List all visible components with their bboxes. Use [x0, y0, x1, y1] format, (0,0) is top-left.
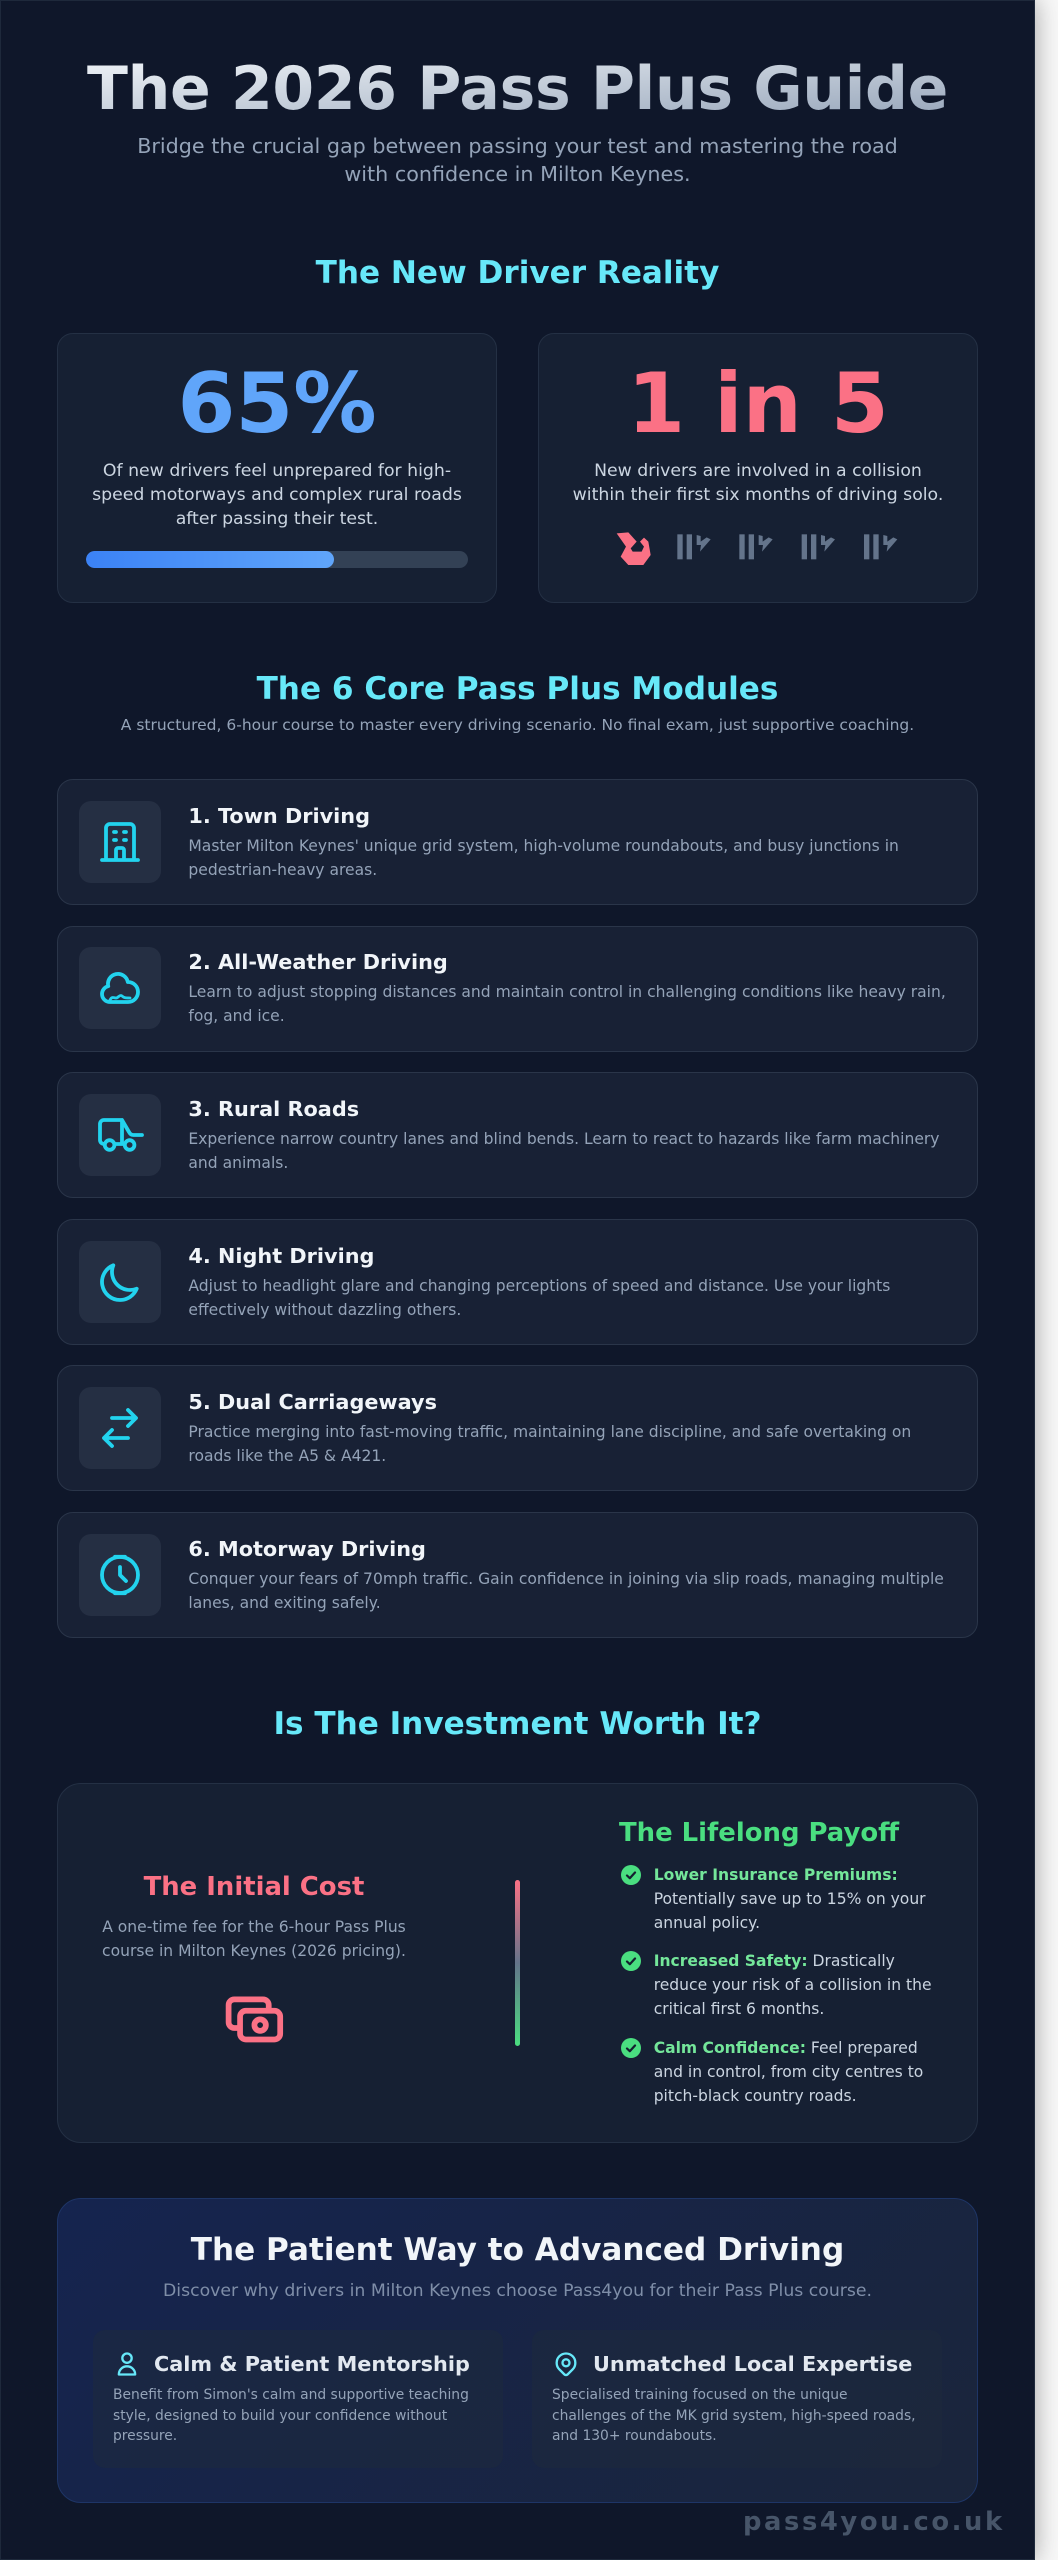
icon: location pin: [556, 2352, 576, 2376]
title: The 2026 Pass Plus Guide: [87, 54, 948, 124]
module title: 3. Rural Roads: [188, 1097, 359, 1121]
benefit text: [654, 2039, 923, 2105]
stat description: [573, 461, 943, 505]
progress bar: 65%: [86, 551, 468, 568]
cost description: [102, 1918, 406, 1960]
sub-panel text: challenges of the MK grid system, high-speed roads,: [552, 2408, 916, 2424]
module description: effectively without dazzling others.: [188, 1301, 461, 1319]
module description: [188, 837, 899, 879]
benefit: calm confidence: [621, 2038, 923, 2105]
stat number: 65%: 65%: [177, 355, 377, 452]
icon: clock: [79, 1534, 161, 1616]
module 4: night driving: [57, 1219, 978, 1345]
module description: and animals.: [188, 1154, 288, 1172]
icon: person: [118, 2352, 136, 2376]
module title: 6. Motorway Driving: [188, 1536, 426, 1560]
subtitle: [137, 134, 898, 186]
icons: one in five drivers: [616, 532, 898, 565]
sub-panel title: Calm & Patient Mentorship: [154, 2352, 470, 2376]
benefit text: [654, 1952, 932, 2018]
module title: 2. All-Weather Driving: [188, 950, 448, 974]
module description: [188, 1423, 911, 1465]
stat description: after passing their test.: [176, 509, 378, 529]
heading: the 6 core modules: The 6 Core Pass Plus Modules: [257, 671, 778, 707]
icon: building: [79, 801, 161, 883]
stat description: speed motorways and complex rural roads: [92, 485, 462, 505]
icon: opposing arrows: [79, 1387, 161, 1469]
stat description: within their first six months of driving solo.: [573, 485, 943, 505]
icon: cloud: [79, 947, 161, 1029]
stat description: [92, 461, 462, 529]
module description: fog, and ice.: [188, 1007, 285, 1025]
benefit text: and in control, from city centres to: [654, 2063, 923, 2081]
sub-panel text: style, designed to build your confidence without: [113, 2408, 447, 2424]
panel: investment comparison: [57, 1783, 978, 2143]
stat description: Of new drivers feel unprepared for high-: [103, 461, 451, 481]
module title: 1. Town Driving: [188, 804, 370, 828]
heading: the patient way to advanced driving: The Patient Way to Advanced Driving: [191, 2232, 844, 2268]
subtitle: with confidence in Milton Keynes.: [344, 162, 691, 186]
sub-panel text: [552, 2387, 916, 2444]
module description: Experience narrow country lanes and blind bends. Learn to react to hazards like farm machinery: [188, 1130, 939, 1148]
module title: 5. Dual Carriageways: [188, 1390, 437, 1414]
icon: moon: [79, 1241, 161, 1323]
stat number: 1 in 5: 1 in 5: [627, 355, 889, 452]
module 3: rural roads: [57, 1072, 978, 1198]
sub-panel text: Specialised training focused on the unique: [552, 2387, 848, 2403]
benefit text: Calm Confidence: Feel prepared: [654, 2039, 918, 2057]
module 1: town driving: [57, 779, 978, 905]
heading: the new driver reality: The New Driver Reality: [316, 255, 719, 291]
module description: [188, 1570, 944, 1612]
icon: farm vehicle: [79, 1094, 161, 1176]
panel intro: Discover why drivers in Milton Keynes choose Pass4you for their Pass Plus course.: [163, 2280, 872, 2300]
benefit text: pitch-black country roads.: [654, 2087, 857, 2105]
benefit text: annual policy.: [654, 1914, 760, 1932]
benefit text: [654, 1866, 926, 1932]
sub-panel text: and 130+ roundabouts.: [552, 2428, 717, 2444]
watermark: pass4you.co.uk: [743, 2507, 1005, 2537]
section intro: A structured, 6-hour course to master every driving scenario. No final exam, just supportive coaching.: [121, 716, 914, 734]
icon: check: [621, 2038, 641, 2058]
panel: 65% stat: [57, 333, 497, 603]
icon: check: [621, 1865, 641, 1885]
module description: pedestrian-heavy areas.: [188, 861, 377, 879]
sub-panel text: [113, 2387, 469, 2444]
module description: Conquer your fears of 70mph traffic. Gain confidence in joining via slip roads, managing multiple: [188, 1570, 944, 1588]
module description: Practice merging into fast-moving traffic, maintaining lane discipline, and safe overtaking on: [188, 1423, 911, 1441]
heading: the initial cost: The Initial Cost: [144, 1872, 364, 1902]
benefit: increased safety: [621, 1951, 932, 2018]
benefit text: reduce your risk of a collision in the: [654, 1976, 932, 1994]
module description: Master Milton Keynes' unique grid system, high-volume roundabouts, and busy junctions in: [188, 837, 899, 855]
cost description: course in Milton Keynes (2026 pricing).: [102, 1942, 406, 1960]
module 2: all-weather driving: [57, 926, 978, 1052]
panel: the patient way: [57, 2198, 978, 2503]
cost description: A one-time fee for the 6-hour Pass Plus: [102, 1918, 406, 1936]
heading: the lifelong payoff: The Lifelong Payoff: [619, 1818, 899, 1848]
module description: [188, 1130, 939, 1172]
benefit text: critical first 6 months.: [654, 2000, 824, 2018]
benefit text: Increased Safety: Drastically: [654, 1952, 895, 1970]
module description: Learn to adjust stopping distances and maintain control in challenging conditions like heavy rain,: [188, 983, 946, 1001]
module description: [188, 1277, 890, 1319]
module description: [188, 983, 946, 1025]
module title: 4. Night Driving: [188, 1244, 374, 1268]
subtitle: Bridge the crucial gap between passing your test and mastering the road: [137, 134, 898, 158]
heading: is the investment worth it: Is The Investment Worth It?: [273, 1706, 762, 1742]
divider: cost to payoff: [515, 1880, 520, 2046]
module description: lanes, and exiting safely.: [188, 1594, 381, 1612]
module 6: motorway driving: [57, 1512, 978, 1638]
module description: roads like the A5 & A421.: [188, 1447, 386, 1465]
benefit text: Potentially save up to 15% on your: [654, 1890, 926, 1908]
benefit text: Lower Insurance Premiums:: [654, 1866, 898, 1884]
sub-panel text: pressure.: [113, 2428, 177, 2444]
sub-panel: mentorship: [93, 2330, 503, 2468]
sub-panel title: Unmatched Local Expertise: [593, 2352, 912, 2376]
module 5: dual carriageways: [57, 1365, 978, 1491]
stat description: New drivers are involved in a collision: [594, 461, 922, 481]
panel: 1 in 5 stat: [538, 333, 978, 603]
module description: Adjust to headlight glare and changing perceptions of speed and distance. Use your lights: [188, 1277, 890, 1295]
benefit: lower insurance premiums: [621, 1865, 926, 1932]
sub-panel: local expertise: [532, 2330, 942, 2468]
icon: cash: [226, 1996, 284, 2042]
icon: check: [621, 1951, 641, 1971]
sub-panel text: Benefit from Simon's calm and supportive teaching: [113, 2387, 469, 2403]
